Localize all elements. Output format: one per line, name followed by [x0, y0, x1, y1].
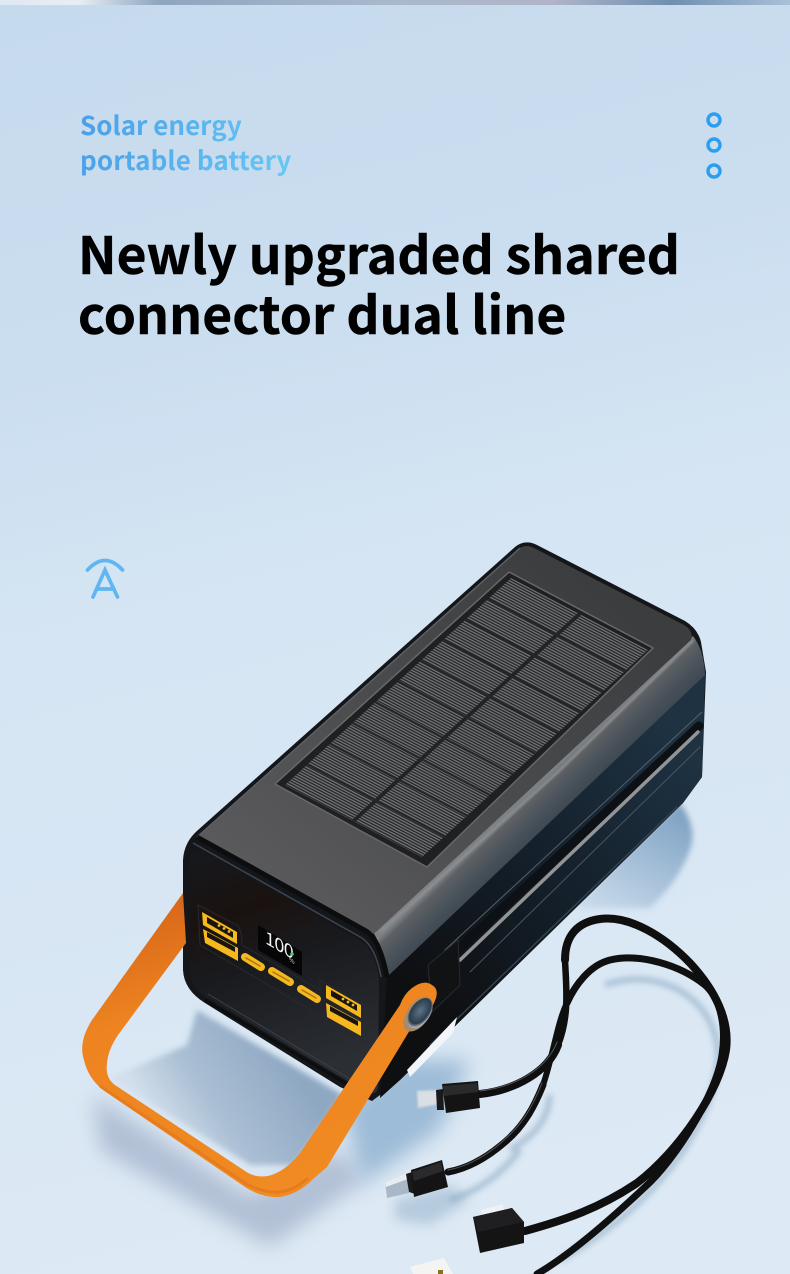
- power bank: [183, 542, 706, 1101]
- icon: brand logo A with arc: [88, 560, 122, 597]
- LED display: [258, 922, 302, 976]
- port plate outlines: [198, 905, 367, 1043]
- reflections under the battery: [93, 803, 692, 1247]
- right-angle connector: [473, 1204, 524, 1253]
- LED display: %: [289, 954, 295, 966]
- Type-C ports: [245, 957, 317, 999]
- panel frame: [275, 572, 653, 867]
- front bevel: [197, 837, 387, 977]
- solar panel: [275, 572, 653, 867]
- chamfer edge: [372, 636, 705, 977]
- side face: [380, 675, 705, 1098]
- icon: three ring dots: [708, 114, 720, 177]
- cable clip box: [428, 940, 460, 1012]
- panel cells: [285, 578, 648, 857]
- front face: [190, 850, 379, 1093]
- USB-A plug: [410, 1258, 453, 1274]
- type-c connector: [385, 1160, 448, 1198]
- title: Newly upgraded shared: [78, 214, 680, 289]
- cable reflections: [450, 979, 718, 1260]
- lightning cable: [480, 919, 727, 1231]
- body silhouette: [183, 542, 706, 1101]
- type-c cable: [448, 958, 723, 1274]
- lightning connector: [417, 1081, 480, 1113]
- title: [78, 214, 680, 349]
- top face: [197, 546, 692, 934]
- subtitle: Solar energy: [80, 106, 242, 143]
- subtitle: [80, 106, 291, 178]
- handle lower edge shade: [100, 1086, 308, 1192]
- handle strap: [82, 893, 437, 1197]
- handle rivet: [398, 991, 438, 1037]
- orange handle: [82, 893, 438, 1197]
- side grooves: [430, 712, 702, 1045]
- cables: [385, 919, 727, 1274]
- USB ports: [202, 912, 361, 1036]
- LED display: 100: [265, 922, 293, 965]
- subtitle: portable battery: [80, 141, 291, 178]
- title: connector dual line: [78, 274, 566, 349]
- white reflection strip: [407, 1017, 457, 1077]
